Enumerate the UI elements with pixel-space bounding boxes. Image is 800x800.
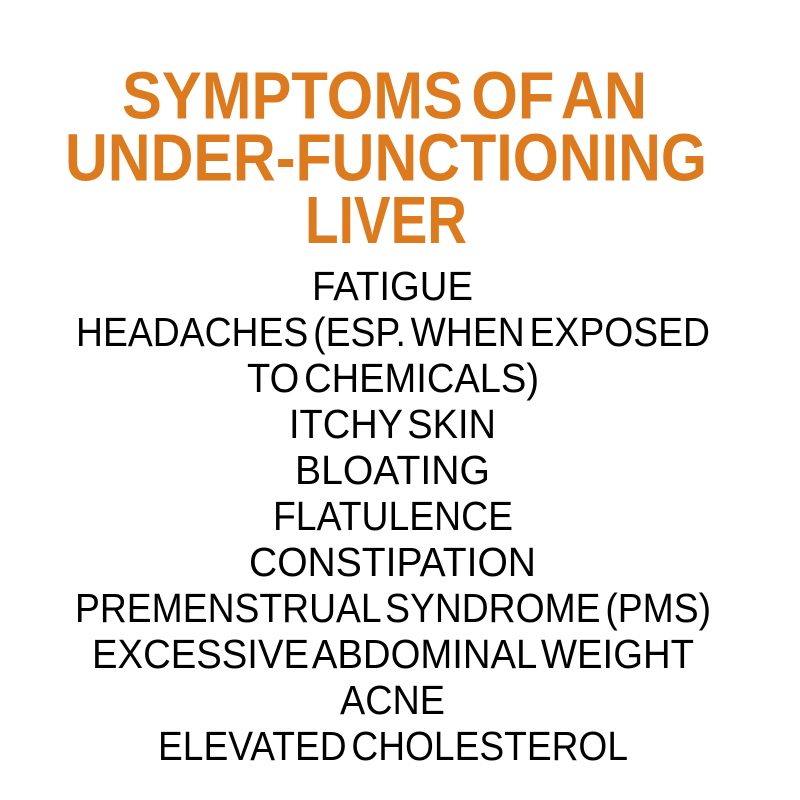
title: SYMPTOMS OF AN bbox=[122, 58, 647, 134]
title bbox=[65, 58, 707, 258]
symptom list: EXCESSIVE ABDOMINAL WEIGHT bbox=[92, 631, 694, 677]
title: LIVER bbox=[305, 183, 467, 258]
symptom list: TO CHEMICALS) bbox=[247, 355, 539, 401]
symptom list: PREMENSTRUAL SYNDROME (PMS) bbox=[75, 585, 711, 631]
symptom list: ELEVATED CHOLESTEROL bbox=[158, 723, 628, 769]
symptom list: ACNE bbox=[340, 677, 445, 723]
symptom list: FLATULENCE bbox=[273, 493, 513, 539]
symptom list: FATIGUE bbox=[312, 263, 473, 309]
symptom list: CONSTIPATION bbox=[249, 539, 536, 585]
symptom list bbox=[75, 263, 711, 769]
symptom list: ITCHY SKIN bbox=[289, 401, 496, 447]
title: UNDER-FUNCTIONING bbox=[65, 120, 707, 196]
symptom list: BLOATING bbox=[295, 447, 490, 493]
symptom list: HEADACHES (ESP. WHEN EXPOSED bbox=[76, 309, 710, 355]
